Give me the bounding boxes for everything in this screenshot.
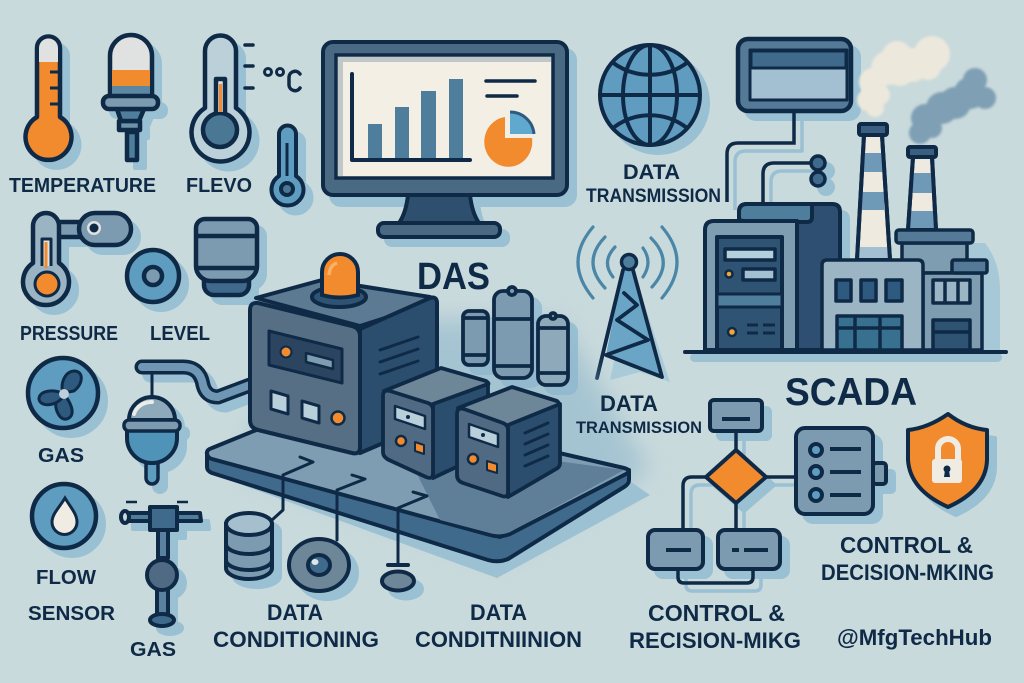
icon: connector nodes <box>811 156 825 186</box>
flowchart connectors <box>678 432 797 583</box>
icon: hmi card <box>738 39 851 111</box>
icon: dial thermometer <box>191 36 249 162</box>
vents <box>380 337 418 374</box>
platform shadow <box>215 475 650 578</box>
main daq cabinet <box>250 280 437 453</box>
label: flevo: FLEVO <box>186 175 252 197</box>
label: gas upper: GAS <box>38 445 84 467</box>
panel light <box>280 346 292 358</box>
label: control and decision-mking: DECISION-MKING <box>821 560 994 585</box>
icon: gas fan <box>28 358 98 428</box>
icon: scale ticks and degree symbol <box>245 45 300 91</box>
icon: valve assembly <box>121 502 201 626</box>
top box <box>710 400 762 431</box>
monitor stand <box>378 195 500 237</box>
cabinet top <box>256 280 434 326</box>
panel: scada factory <box>683 124 1008 362</box>
label: control and decision-mking: CONTROL & <box>840 532 973 558</box>
monitor screen <box>336 55 553 178</box>
icon: knob <box>382 565 414 590</box>
icon: database <box>226 513 272 579</box>
label: data conditioning: CONDITIONING <box>213 627 379 652</box>
cabinet side <box>360 298 437 453</box>
icon: small thermometer <box>272 126 304 206</box>
left box <box>648 530 703 569</box>
label: scada: SCADA <box>785 371 917 414</box>
soft shadow behind factory <box>967 243 1000 350</box>
label: control and recision-mikg: CONTROL & <box>648 600 785 626</box>
label: data transmission upper <box>586 161 721 207</box>
batteries <box>463 287 568 385</box>
display panel <box>269 331 342 383</box>
server tower <box>705 204 840 350</box>
chimney: tall <box>857 124 890 260</box>
platform top <box>207 400 629 536</box>
list panel <box>796 428 886 514</box>
label: data conditioning <box>213 600 379 652</box>
label: flow: FLOW <box>36 567 96 589</box>
square button two <box>302 401 319 423</box>
panel: flowchart <box>648 400 886 583</box>
label: data transmission lower: TRANSMISSION <box>576 418 702 437</box>
platform lip <box>207 454 629 561</box>
smoke: dark <box>909 68 996 144</box>
cabinet front <box>250 303 360 453</box>
ground line <box>683 350 1008 362</box>
label: gas lower: GAS <box>130 639 176 661</box>
tower body <box>606 270 662 377</box>
smoke: white <box>857 36 950 117</box>
siren light <box>312 254 366 307</box>
label: data transmission lower <box>576 391 702 437</box>
label: temperature: TEMPERATURE <box>9 175 156 197</box>
icon: pressure gauge <box>23 213 131 305</box>
square button one <box>271 391 288 414</box>
small module one <box>383 368 488 478</box>
main building <box>822 260 923 350</box>
label: data transmission lower: DATA <box>600 391 658 416</box>
pie chart <box>484 112 534 167</box>
monitor frame <box>323 42 567 195</box>
soft glow under equipment <box>240 320 650 560</box>
panel: das equipment <box>207 254 650 578</box>
wires from platform <box>272 457 427 563</box>
platform top darker side <box>400 440 624 534</box>
icon: pipe bulb sensor <box>124 367 250 484</box>
icon: security shield <box>908 414 987 507</box>
right box <box>718 530 780 569</box>
label: data conditniinion: DATA <box>470 600 527 625</box>
label: control and recision-mikg <box>629 600 801 653</box>
label: handle: @MfgTechHub <box>837 625 992 650</box>
small module two <box>457 387 560 497</box>
label: control and recision-mikg: RECISION-MIKG <box>629 628 801 653</box>
decision diamond <box>706 450 766 503</box>
bar chart <box>352 74 470 160</box>
label: data transmission upper: DATA <box>623 161 680 184</box>
label: sensor: SENSOR <box>28 603 116 625</box>
chimney: short <box>908 147 936 230</box>
connector wires <box>727 110 810 205</box>
icon: globe <box>600 45 700 145</box>
panel switch <box>306 353 333 369</box>
platform <box>207 400 629 561</box>
icon: level cylinder <box>196 219 257 295</box>
lock <box>932 439 962 483</box>
icon: radio tower <box>578 227 677 382</box>
label: control and decision-mking <box>821 532 994 585</box>
signal arcs <box>578 227 677 298</box>
panel: monitor <box>323 42 567 237</box>
icon: level disc <box>127 250 179 302</box>
icon: bulb sensor <box>103 35 158 160</box>
icon: orange thermometer <box>26 36 72 160</box>
orange button <box>332 412 344 424</box>
label: pressure: PRESSURE <box>20 323 118 345</box>
label: data conditniinion <box>415 600 582 652</box>
label: data conditioning: DATA <box>267 600 323 625</box>
tower shadow <box>610 270 670 382</box>
legend lines <box>486 81 535 96</box>
icon: flow droplet <box>32 484 96 548</box>
right building <box>896 230 987 350</box>
icon: sensor disc <box>289 539 349 591</box>
label: data conditniinion: CONDITNIINION <box>415 627 582 652</box>
label: level: LEVEL <box>150 323 210 345</box>
label: data transmission upper: TRANSMISSION <box>586 186 721 207</box>
label: das: DAS <box>417 256 490 298</box>
